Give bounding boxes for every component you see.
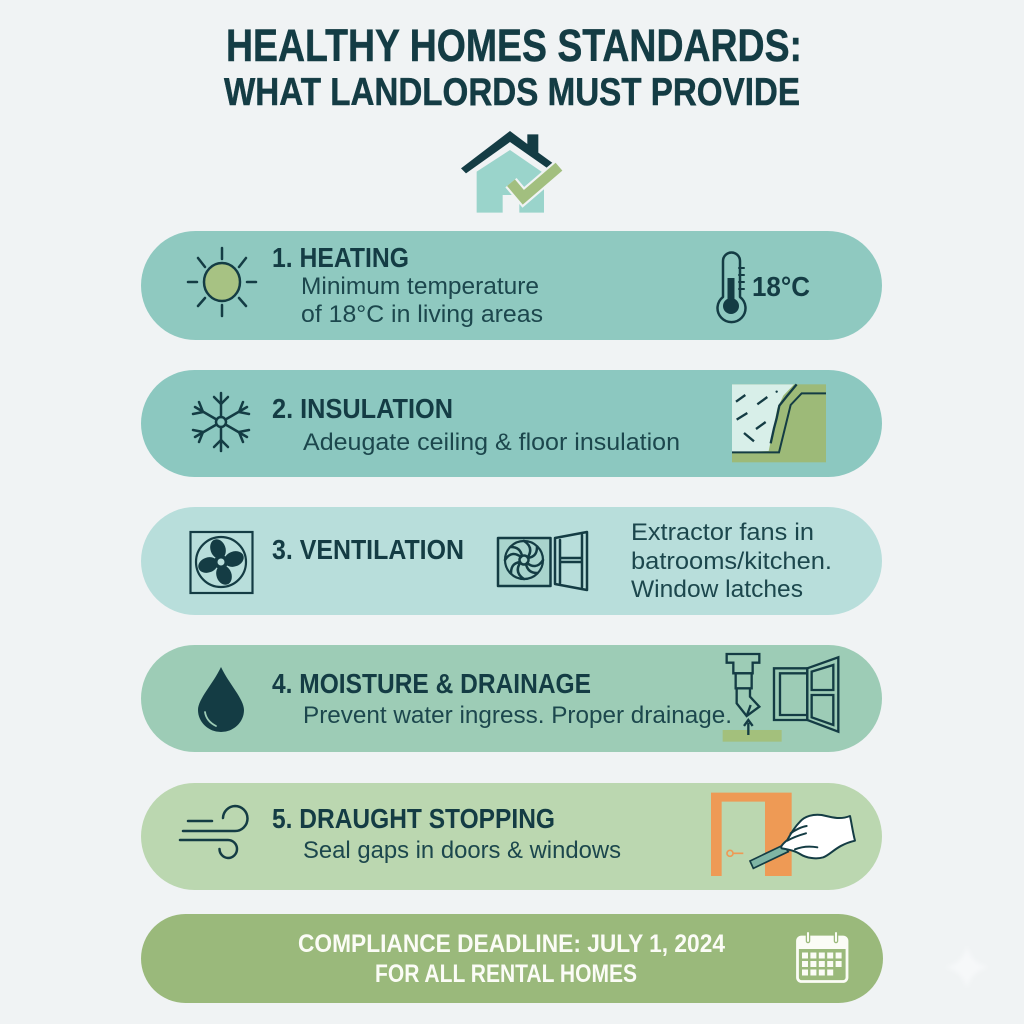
- illustration: hand sealing door gap: [711, 793, 855, 876]
- description: ventilation: batrooms/kitchen.: [631, 548, 832, 575]
- title: HEALTHY HOMES STANDARDS:: [226, 20, 802, 71]
- panel: ventilation: [141, 507, 882, 615]
- description: heating: Minimum temperature: [301, 273, 539, 300]
- icon: fan and open window: [498, 532, 587, 590]
- panel: moisture and drainage: [141, 645, 882, 752]
- title: WHAT LANDLORDS MUST PROVIDE: [224, 71, 800, 114]
- text: compliance deadline: FOR ALL RENTAL HOMES: [375, 960, 637, 988]
- label: 18°C: 18°C: [752, 271, 810, 302]
- icon: drain pipe and window: [723, 654, 838, 742]
- icon: extractor fan: [190, 532, 252, 593]
- text: compliance deadline: COMPLIANCE DEADLINE: JULY 1, 2024: [298, 930, 725, 958]
- panel: compliance deadline: [141, 914, 883, 1003]
- description: insulation: Adeugate ceiling & floor insulation: [303, 429, 680, 456]
- heading: ventilation: 3. VENTILATION: [272, 534, 464, 565]
- description: moisture and drainage: Prevent water ingress. Proper drainage.: [303, 702, 732, 729]
- heading: heating: 1. HEATING: [272, 242, 409, 273]
- panel: draught stopping: [141, 783, 882, 890]
- icon: wind: [180, 806, 247, 858]
- illustration: insulation cross-section: [732, 384, 826, 462]
- description: ventilation: [631, 519, 832, 603]
- description: draught stopping: Seal gaps in doors & windows: [303, 837, 621, 864]
- text: compliance deadline: [298, 930, 725, 988]
- icon: water drop: [198, 667, 244, 732]
- icon: calendar: [798, 933, 847, 982]
- description: ventilation: Extractor fans in: [631, 519, 814, 546]
- title: [224, 20, 802, 114]
- description: ventilation: Window latches: [631, 576, 803, 603]
- panel: insulation: [141, 370, 882, 477]
- icon: faint sparkle: [945, 946, 989, 988]
- description: heating: of 18°C in living areas: [301, 301, 543, 328]
- icon: thermometer: [718, 252, 746, 322]
- panel: heating: [141, 231, 882, 340]
- heading: moisture and drainage: 4. MOISTURE & DRAINAGE: [272, 668, 591, 699]
- icon: house with check mark: [461, 131, 559, 213]
- icon: sun: [188, 248, 256, 316]
- icon: snowflake: [193, 393, 249, 451]
- description: heating: [301, 273, 543, 328]
- heading: draught stopping: 5. DRAUGHT STOPPING: [272, 803, 555, 834]
- heading: insulation: 2. INSULATION: [272, 393, 453, 424]
